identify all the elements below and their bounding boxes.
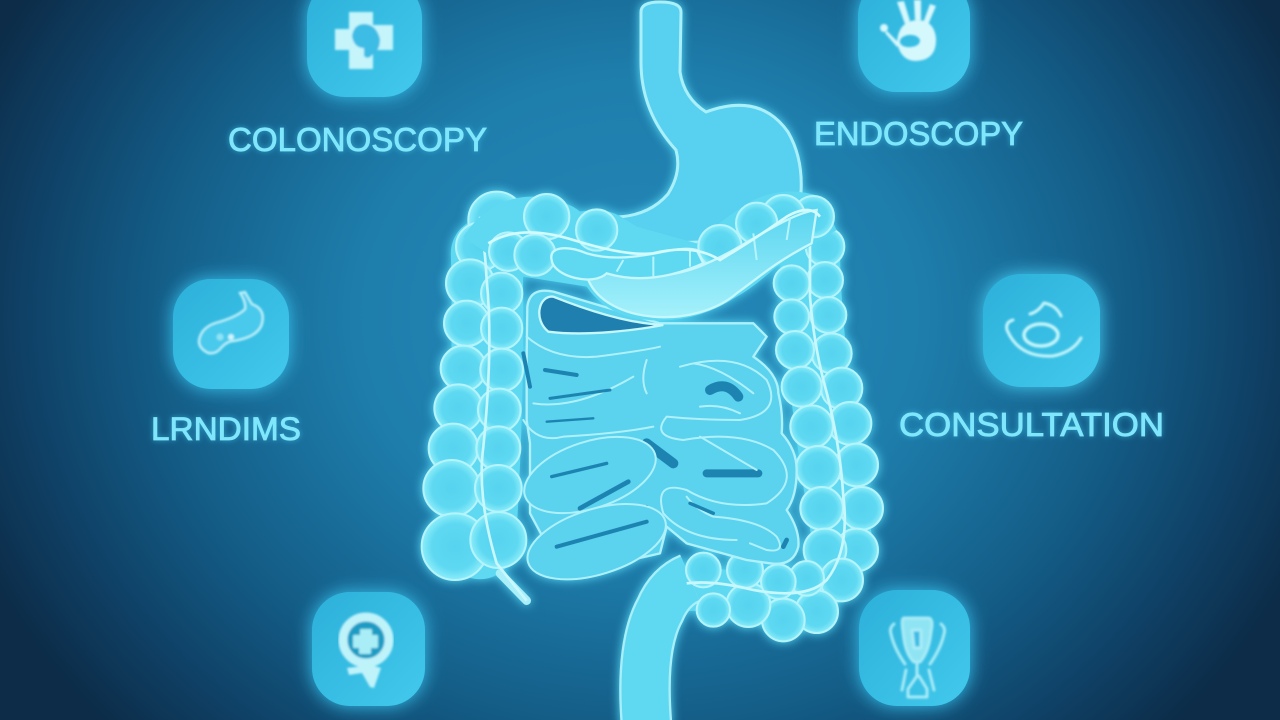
colon underlay bbox=[480, 247, 843, 602]
transverse colon mass bbox=[463, 192, 837, 320]
transverse colon seam bbox=[488, 210, 820, 260]
icon: endoscopy hand bbox=[858, 0, 970, 92]
icon: colonoscopy medical cross bbox=[307, 0, 422, 97]
small intestine dark gaps bbox=[523, 353, 787, 547]
digestive tract bbox=[422, 2, 883, 720]
intestine slots bbox=[547, 390, 713, 547]
icon: medical badge bbox=[312, 592, 425, 706]
label: colonoscopy: COLONOSCOPY bbox=[228, 121, 487, 158]
sigmoid haustra bbox=[686, 552, 863, 641]
transverse colon haustra band bbox=[551, 248, 703, 280]
icon: trophy bbox=[859, 590, 970, 706]
ascending colon seam bbox=[480, 217, 527, 601]
window between stomach and top band bbox=[539, 297, 663, 333]
transverse colon upper chain bbox=[489, 194, 834, 276]
icon: pancreas outline bbox=[173, 279, 289, 389]
rectum bbox=[645, 578, 690, 720]
label: consultation: CONSULTATION bbox=[899, 406, 1164, 443]
label: lrndims: LRNDIMS bbox=[151, 411, 301, 447]
small intestine lobes bbox=[515, 422, 675, 594]
icon: consultation swirl bbox=[983, 274, 1100, 387]
descending colon bbox=[774, 227, 883, 571]
descending seam bbox=[687, 240, 845, 593]
transverse colon lower sac bbox=[588, 210, 817, 317]
haustra folds bbox=[617, 218, 790, 277]
small intestine mass bbox=[527, 291, 799, 570]
ascending colon bbox=[422, 192, 526, 580]
esophagus and stomach bbox=[590, 2, 801, 245]
label: endoscopy: ENDOSCOPY bbox=[814, 115, 1023, 152]
appendix bbox=[500, 573, 527, 601]
small intestine contours bbox=[523, 337, 787, 551]
colon and small intestine, drawn in crop coordinates bbox=[422, 192, 883, 720]
